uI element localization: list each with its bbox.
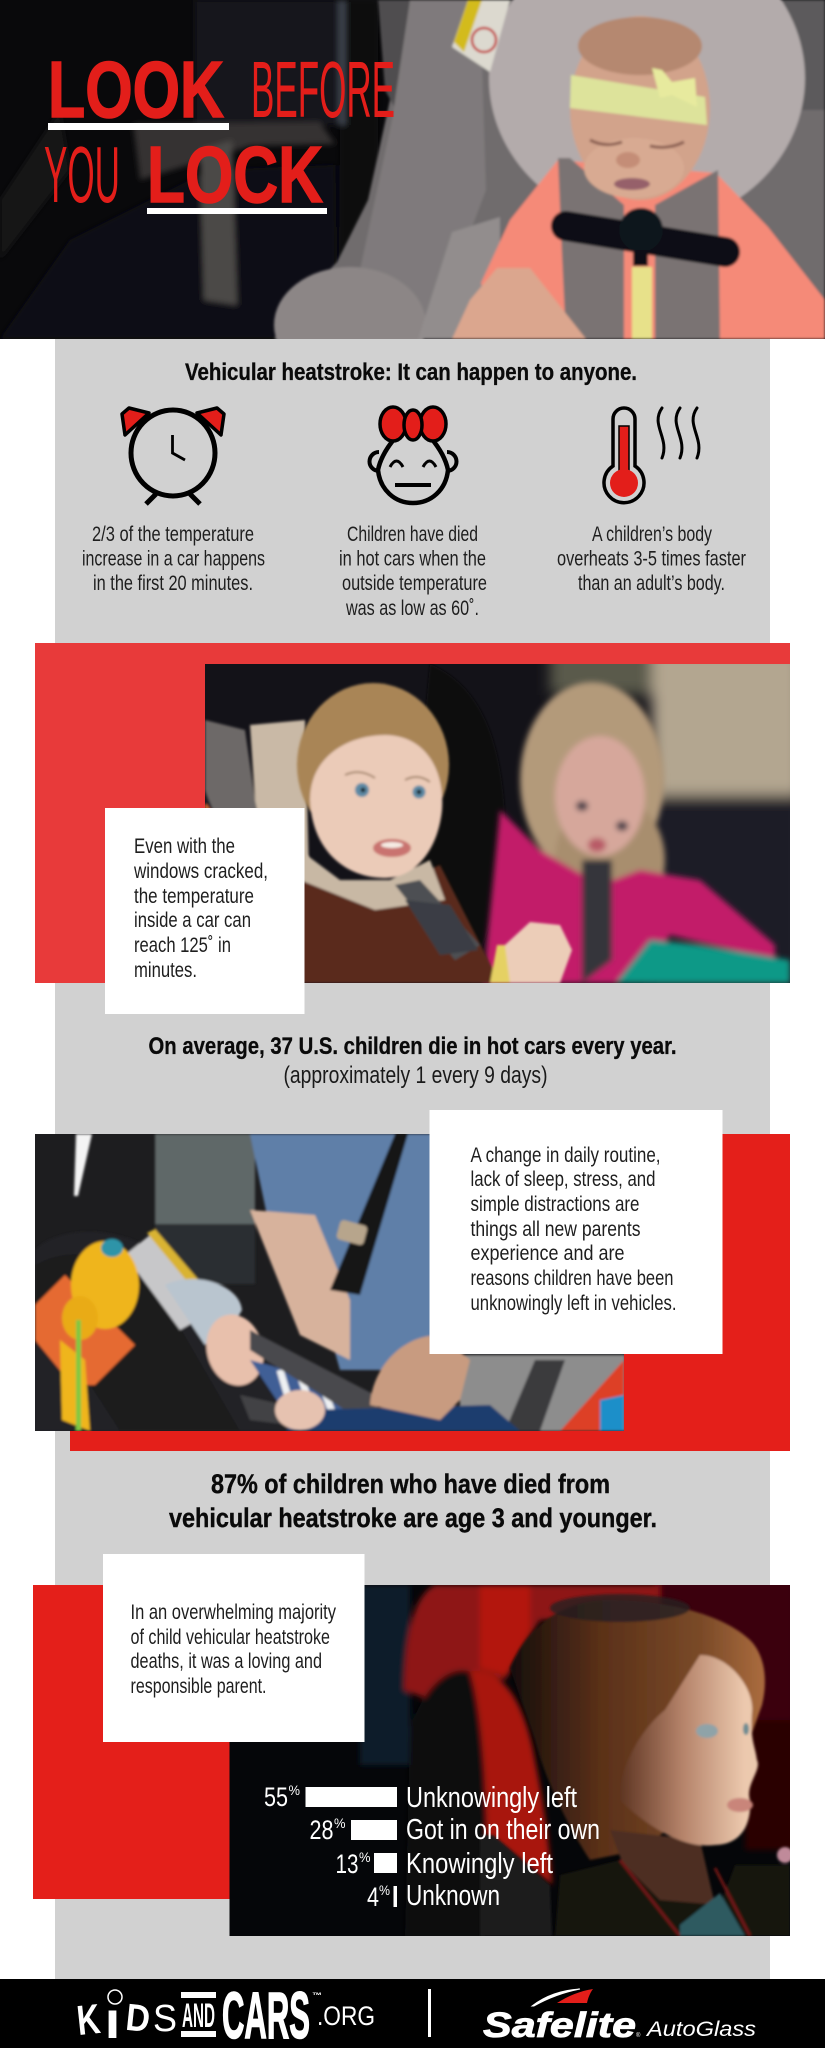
text: outside temperature [339, 522, 487, 620]
bar: 28 percent got in on their own: % [334, 1815, 346, 1831]
callout: loving parent [103, 1554, 364, 1742]
logo: KidsAndCars.org: I [105, 2003, 120, 2047]
heading: vehicular heatstroke: Vehicular heatstroke: It can happen to anyone. [185, 359, 637, 386]
logo: Safelite AutoGlass: AutoGlass [645, 2018, 757, 2041]
callout: windows cracked [105, 808, 304, 1014]
callout: change in routine: lack of sleep, stress, and [470, 1167, 656, 1191]
callout: change in routine: experience and are [470, 1241, 624, 1265]
callout: windows cracked: windows cracked, [133, 859, 268, 883]
text: outside temperature: was as low as 60˚. [345, 596, 479, 620]
photo: father buckling baby into car seat [35, 1134, 624, 1431]
callout: loving parent: of child vehicular heatstroke [130, 1625, 330, 1649]
callout: change in routine: reasons children have been [470, 1266, 674, 1290]
bar chart: circumstances of deaths [264, 1782, 600, 1912]
text: outside temperature: Children have died [347, 522, 478, 546]
hero photo: sleeping baby in car seat [0, 0, 825, 339]
text: body overheats: overheats 3-5 times faster [557, 546, 746, 570]
bar: 28 percent got in on their own: 28 [310, 1815, 334, 1845]
callout: loving parent: In an overwhelming majority [130, 1600, 336, 1624]
text: body overheats: A children’s body [592, 522, 712, 546]
text: temperature increase: increase in a car happens [82, 546, 265, 570]
icon: baby with bow [370, 407, 456, 503]
panel: red backing for father photo [70, 1134, 790, 1451]
bar: 4 percent unknown: % [379, 1882, 390, 1898]
bar: 55 percent unknowingly left: % [288, 1782, 300, 1798]
callout: windows cracked: inside a car can [134, 908, 251, 932]
heading: 37 children per year [148, 1033, 676, 1089]
callout: change in routine: things all new parents [470, 1217, 640, 1241]
divider between logos [428, 1989, 431, 2037]
title: Look Before You Lock: LOCK [147, 130, 323, 219]
heading: 37 children per year: On average, 37 U.S. children die in hot cars every year. [148, 1033, 676, 1060]
text: body overheats [557, 522, 746, 595]
text: outside temperature: in hot cars when the [339, 546, 486, 570]
heading: 37 children per year: (approximately 1 every 9 days) [284, 1062, 548, 1089]
photo: two children in car seats [205, 664, 790, 983]
callout: windows cracked: reach 125˚ in [134, 933, 231, 957]
bar: 4 percent unknown [367, 1880, 500, 1912]
bar: 55 percent unknowingly left [264, 1782, 577, 1814]
bar: 55 percent unknowingly left: 55 [264, 1782, 288, 1812]
text: temperature increase: 2/3 of the temperature [92, 522, 254, 546]
title: Look Before You Lock: LOOK [48, 45, 224, 134]
heading: 87 percent age 3 and younger: vehicular heatstroke are age 3 and younger. [169, 1503, 657, 1533]
heading: 87 percent age 3 and younger: 87% of children who have died from [211, 1469, 610, 1499]
callout: loving parent: deaths, it was a loving and [130, 1649, 322, 1673]
bar: 13 percent knowingly left [336, 1848, 553, 1880]
grey background panel [55, 339, 770, 1979]
bar: 4 percent unknown: Unknown [406, 1880, 500, 1912]
text: BEFORE [251, 45, 395, 134]
logo: Safelite AutoGlass: ® [636, 2032, 641, 2039]
panel: red backing for girl photo [33, 1585, 333, 1899]
logo: Safelite AutoGlass: Safelite [483, 2006, 636, 2045]
title: Look Before You Lock [44, 45, 395, 219]
text: body overheats: than an adult’s body. [578, 571, 725, 595]
footer bar [0, 1979, 825, 2048]
callout: change in routine: A change in daily routine, [470, 1143, 660, 1167]
logo: KidsAndCars.org: ™ [312, 1991, 322, 2000]
bar: 55 percent unknowingly left: Unknowingly left [406, 1782, 577, 1814]
callout: change in routine [430, 1110, 722, 1354]
logo: KidsAndCars.org: .ORG [317, 2001, 375, 2031]
icon: thermometer with heat waves [604, 408, 699, 503]
logo: KidsAndCars.org: S [153, 1998, 177, 2040]
logo: KidsAndCars.org [75, 1978, 375, 2048]
callout: loving parent: responsible parent. [130, 1674, 266, 1698]
text: outside temperature: outside temperature [342, 571, 487, 595]
bar: 13 percent knowingly left: 13 [336, 1849, 358, 1879]
bar: 13 percent knowingly left: % [359, 1849, 370, 1865]
callout: windows cracked: the temperature [134, 884, 254, 908]
bar: 4 percent unknown: 4 [367, 1882, 379, 1912]
logo: KidsAndCars.org: K [75, 1995, 102, 2044]
callout: change in routine: simple distractions are [470, 1192, 640, 1216]
photo: girl in red car seat [230, 1585, 790, 1936]
callout: windows cracked: Even with the [134, 834, 235, 858]
bar: 13 percent knowingly left: Knowingly left [406, 1848, 553, 1880]
text: temperature increase [82, 522, 265, 595]
logo: KidsAndCars.org: AND [182, 1997, 215, 2035]
bar: 28 percent got in on their own: Got in on their own [406, 1814, 600, 1846]
panel: red backing for children photo [35, 643, 790, 983]
icon: alarm clock [122, 408, 224, 504]
title: Look Before You Lock: YOU [44, 130, 120, 219]
text: temperature increase: in the first 20 minutes. [93, 571, 253, 595]
callout: change in routine: unknowingly left in vehicles. [470, 1291, 676, 1315]
logo: KidsAndCars.org: D [124, 1997, 152, 2041]
heading: 87 percent age 3 and younger [169, 1469, 657, 1533]
bar: 28 percent got in on their own [310, 1814, 600, 1846]
callout: windows cracked: minutes. [134, 958, 197, 982]
logo: Safelite AutoGlass [483, 1989, 757, 2045]
